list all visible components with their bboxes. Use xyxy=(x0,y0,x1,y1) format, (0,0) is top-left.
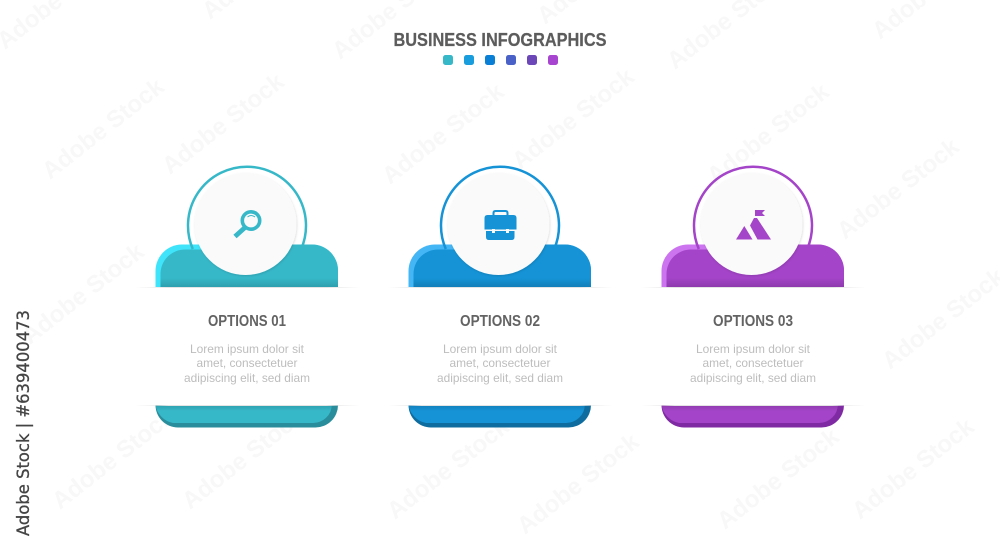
inner circle xyxy=(700,173,802,275)
lower tab xyxy=(408,405,591,428)
colour dots xyxy=(443,55,558,65)
panel: option 01 xyxy=(135,167,360,428)
stock credit: Adobe Stock | #639400473 xyxy=(14,310,34,536)
watermark: Adobe Stock xyxy=(832,133,965,245)
text block: amet, consectetuer xyxy=(450,356,550,370)
text block: Lorem ipsum dolor sit xyxy=(443,342,558,356)
content panel xyxy=(135,287,360,406)
icon: mountain with flag xyxy=(736,210,771,240)
heading: OPTIONS 03 xyxy=(713,313,793,330)
icon: briefcase xyxy=(484,211,516,240)
watermark: Adobe Stock xyxy=(37,73,170,185)
inner circle xyxy=(448,173,550,275)
inner circle xyxy=(194,173,296,275)
text block: adipiscing elit, sed diam xyxy=(690,371,816,385)
text block xyxy=(437,342,563,385)
ring xyxy=(188,167,306,249)
watermark: Adobe Stock xyxy=(507,63,640,175)
ring xyxy=(694,167,812,249)
watermark: Adobe Stock xyxy=(712,423,845,535)
text block: adipiscing elit, sed diam xyxy=(437,371,563,385)
watermark: Adobe Stock xyxy=(512,428,645,540)
text block: Lorem ipsum dolor sit xyxy=(696,342,811,356)
heading: OPTIONS 01 xyxy=(208,313,286,330)
lower tab xyxy=(662,405,844,428)
text block xyxy=(184,342,310,385)
icon: magnifier xyxy=(235,212,260,236)
lower tab xyxy=(156,405,338,428)
watermark: Adobe Stock xyxy=(382,413,515,525)
watermark: Adobe Stock xyxy=(377,78,510,190)
upper tab xyxy=(156,244,338,288)
watermark: Adobe Stock xyxy=(157,68,290,180)
text block: amet, consectetuer xyxy=(196,356,298,370)
panel: option 03 xyxy=(641,167,866,428)
watermark: Adobe Stock xyxy=(177,403,310,515)
text block xyxy=(690,342,816,385)
ring xyxy=(441,167,559,249)
watermark: Adobe Stock xyxy=(17,238,150,350)
upper tab xyxy=(662,244,844,288)
upper tab xyxy=(408,244,591,288)
content panel xyxy=(388,287,613,406)
title: BUSINESS INFOGRAPHICS xyxy=(394,30,606,50)
watermark: Adobe Stock xyxy=(702,78,835,190)
content panel xyxy=(641,287,866,406)
heading: OPTIONS 02 xyxy=(460,313,540,330)
panel: option 02 xyxy=(388,167,613,428)
watermark: Adobe Stock xyxy=(847,413,980,525)
text block: amet, consectetuer xyxy=(702,356,804,370)
text block: adipiscing elit, sed diam xyxy=(184,371,310,385)
watermark: Adobe Stock xyxy=(47,403,180,515)
text block: Lorem ipsum dolor sit xyxy=(190,342,305,356)
